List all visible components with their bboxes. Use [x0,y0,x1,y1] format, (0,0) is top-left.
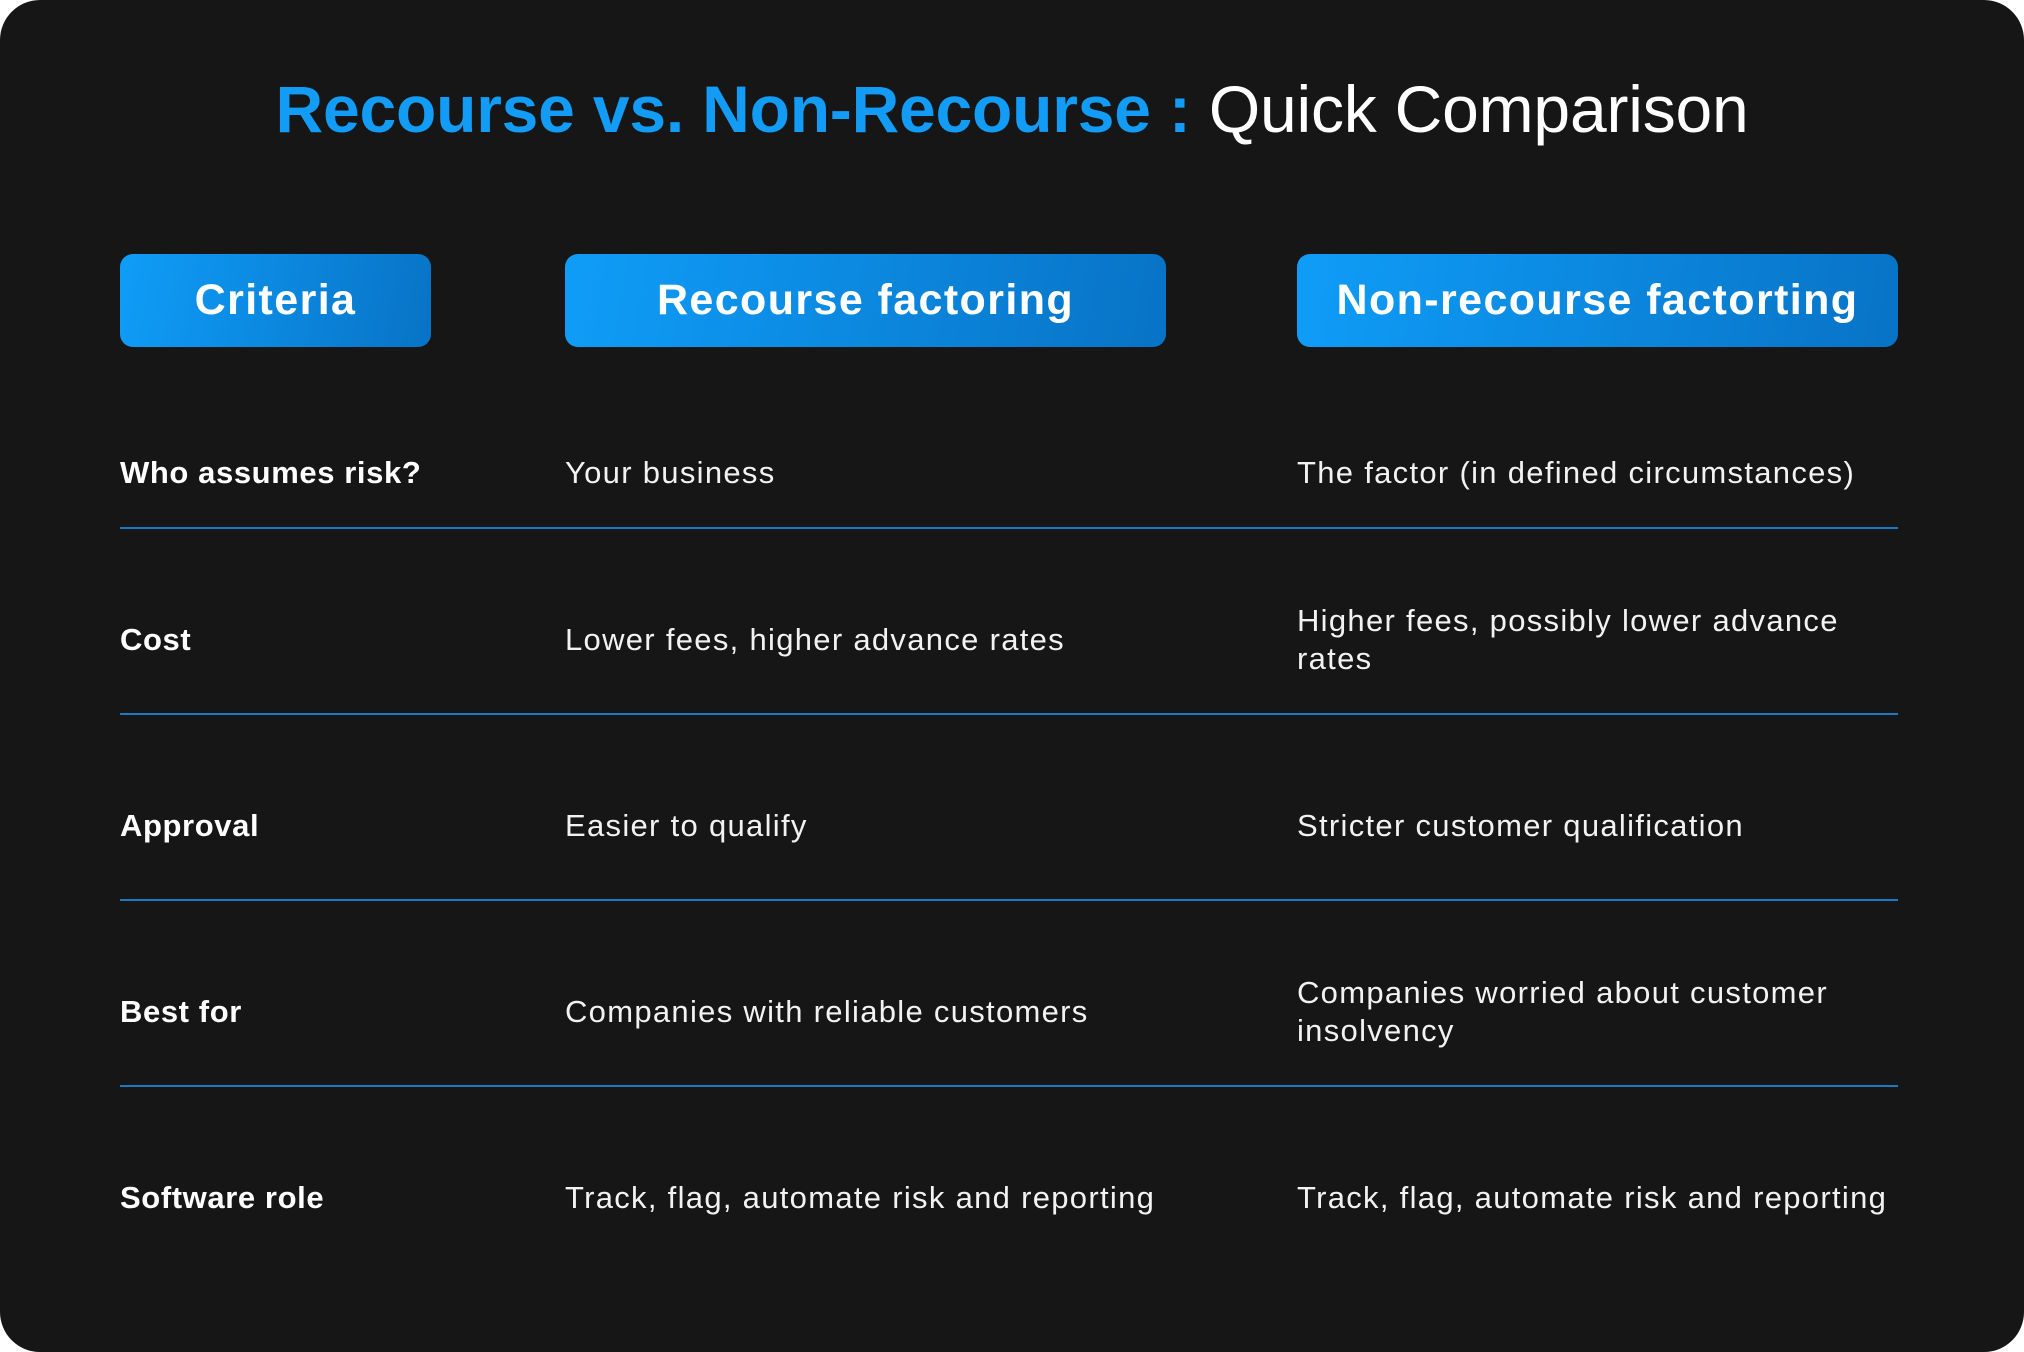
row 2 recourse: Lower fees, higher advance rates [565,622,1065,657]
header: recourse factoring: Recourse factoring [657,276,1074,324]
row 1 recourse: Your business [565,455,776,490]
header: non-recourse factoring: Non-recourse factorting [1336,276,1858,324]
header: recourse factoring [565,254,1166,347]
row 1 non-recourse: The factor (in defined circumstances) [1297,455,1855,490]
header: non-recourse factoring [1297,254,1898,347]
row 3 non-recourse: Stricter customer qualification [1297,808,1744,843]
row 5 non-recourse: Track, flag, automate risk and reporting [1297,1180,1887,1215]
header: criteria: Criteria [195,276,356,324]
row 1 criteria: Who assumes risk? [120,455,421,490]
title: Recourse vs. Non-Recourse : Quick Comparison [275,72,1749,146]
row 5 criteria: Software role [120,1180,324,1215]
row 4 recourse: Companies with reliable customers [565,994,1089,1029]
row 5 recourse: Track, flag, automate risk and reporting [565,1180,1155,1215]
row 2 criteria: Cost [120,622,191,657]
row 4 criteria: Best for [120,994,242,1029]
row 3 criteria: Approval [120,808,259,843]
header: criteria [120,254,431,347]
row 3 recourse: Easier to qualify [565,808,808,843]
row 4 non-recourse: Companies worried about customer insolvency [1297,975,1828,1048]
row 2 non-recourse: Higher fees, possibly lower advance rates [1297,603,1839,676]
